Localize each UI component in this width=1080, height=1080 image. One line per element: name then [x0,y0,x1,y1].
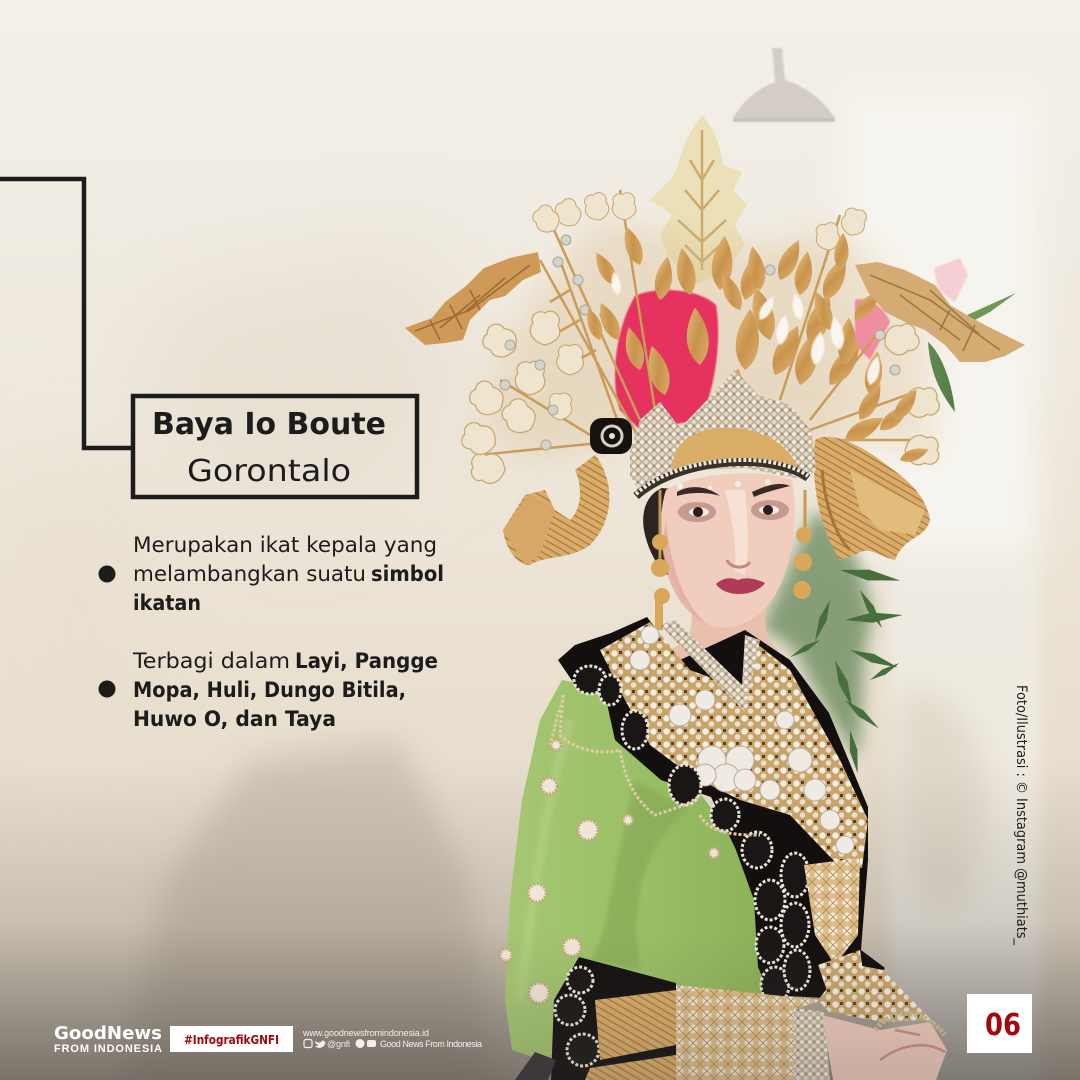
hashtag box [170,1026,293,1052]
silver beaded bracelet [794,1008,830,1080]
connector line [0,179,133,448]
bullet text 1: simbol [371,562,444,586]
page number box: 06 [985,1008,1021,1043]
bottom fade over figure [0,930,1080,1080]
figure: green dress [500,617,885,1065]
sleeve sequin medallions [500,740,719,1003]
right gold ornament [814,437,930,560]
silver beads on branches [500,235,900,450]
title box [133,396,417,497]
woman's hair [643,488,680,575]
scalloped beaded trim [574,666,810,1003]
icon: facebook [356,1039,364,1048]
black velvet collar border [558,617,885,1000]
jewelled crown [630,370,816,496]
black rosette [590,418,632,454]
other forearm jewellery [818,963,944,1033]
bullet text 2: Terbagi dalam [132,649,290,673]
left gold wing [405,252,541,345]
footer logo [54,1023,162,1055]
bullet text 1: ikatan [133,591,201,615]
face [661,473,795,628]
bullet text 2: Layi, Pangge [295,649,438,673]
title: Baya Io Boute [152,407,386,442]
footer social links: www.goodnewsfromindonesia.id [302,1028,429,1038]
footer social links: Good News From Indonesia [380,1039,482,1049]
bullet text 2: Mopa, Huli, Dungo Bitila, [133,678,406,702]
photo credit: Foto/Ilustrasi : © Instagram @muthiats_ [1013,685,1029,946]
earrings [651,490,812,630]
subtitle: Gorontalo [187,454,351,489]
lips [716,578,765,594]
footer logo: GoodNews [54,1023,162,1044]
gold leaves fan [582,224,931,465]
left gold curl ornament [503,455,609,565]
icon: twitter [315,1040,326,1048]
cuff scallops [555,967,599,1066]
white plumes between leaves [609,271,883,386]
hanging lotus brooch [804,858,860,965]
dark skirt [515,1052,556,1080]
gold embroidery panel [595,990,676,1060]
forehead jewels [677,479,771,490]
icon: instagram [304,1040,312,1048]
black cuff [551,957,676,1080]
footer logo: FROM INDONESIA [54,1043,162,1055]
footer social links: @gnfi [327,1039,350,1049]
pink flower behind [615,290,890,430]
foliage behind the figure [760,258,1016,774]
bullet text 2 [98,649,438,731]
hand [822,1015,947,1080]
bullet text 1: Merupakan ikat kepala yang [133,533,437,557]
bullet text 1 [98,533,444,615]
bullet text 1: melambangkan suatu [133,562,366,586]
bullet text 2: Huwo O, dan Taya [133,707,336,731]
eyes and brows [677,484,790,522]
right gold wing [855,262,1025,362]
white rosettes on chest [630,626,854,854]
gold and silver chest embroidery [600,622,868,868]
nose shadow [727,560,750,567]
gold lace cuff [676,985,822,1080]
headdress [405,115,1025,565]
icon: youtube [367,1040,376,1047]
central pale gold plume [650,115,747,285]
dress bodice and sleeve [505,680,770,1065]
footer social links [302,1028,482,1049]
figure: embroidered cuff and hands [515,957,947,1080]
pale filigree leaves left and right [458,191,941,485]
page number box [967,994,1032,1053]
headdress backing glow [480,220,930,460]
pearl chains on sleeve [550,695,760,835]
hashtag box: #InfografikGNFI [184,1032,279,1047]
icon: wall lamp [733,48,835,122]
neck [670,595,778,710]
gold branches [478,190,930,455]
